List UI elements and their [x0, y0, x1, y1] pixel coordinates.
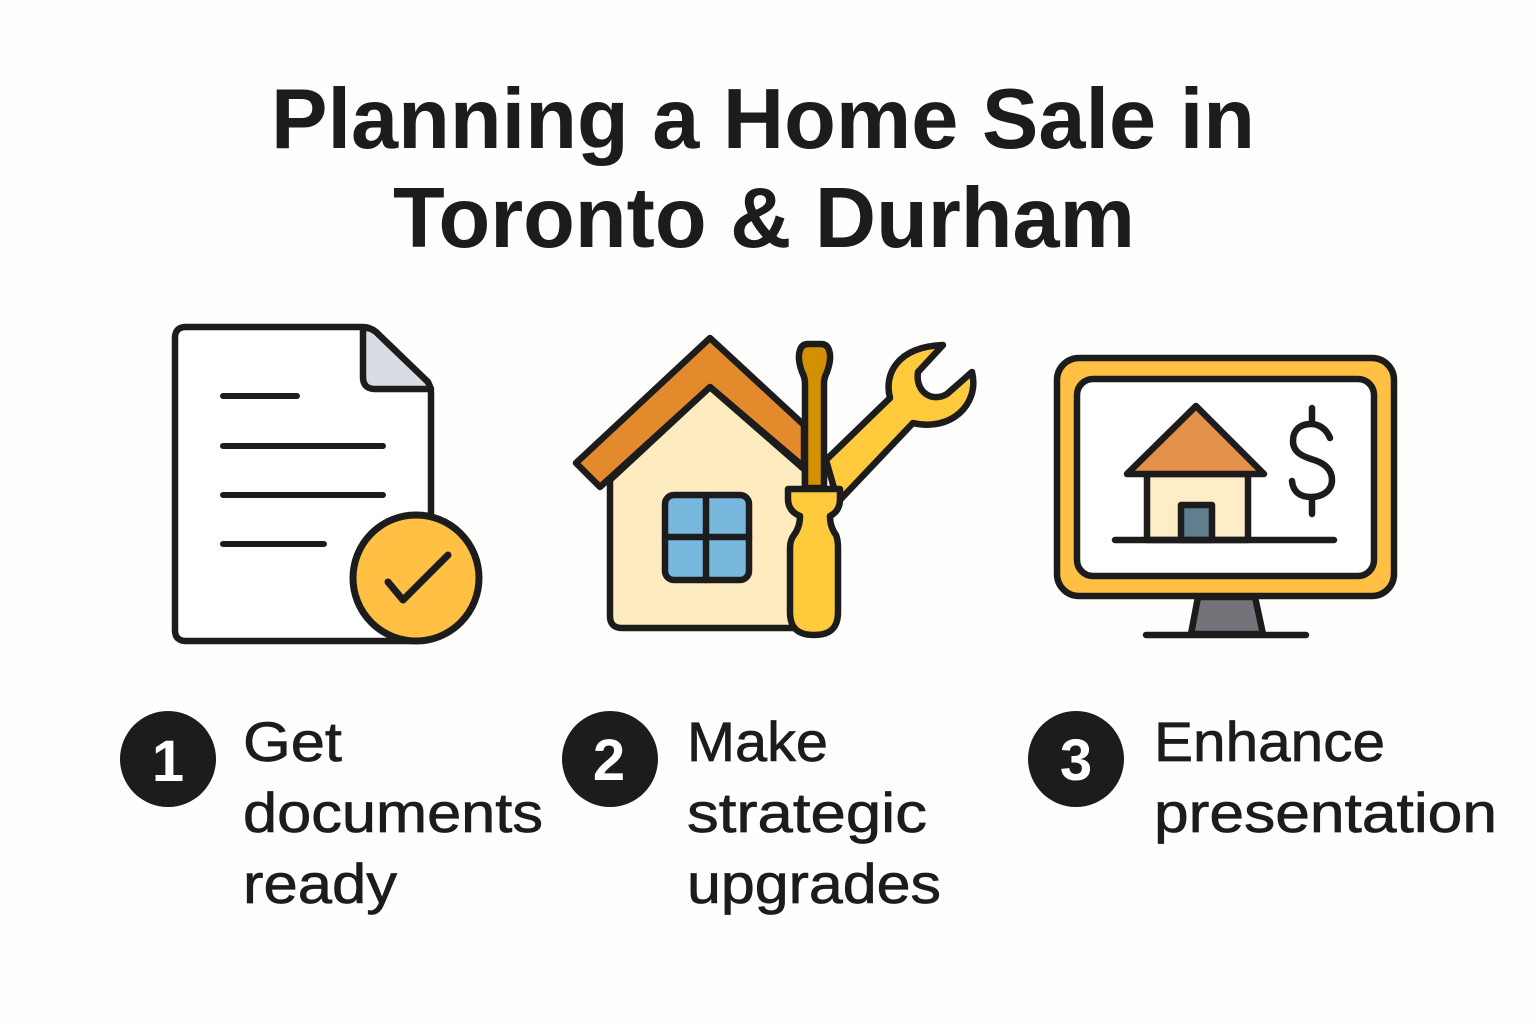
step 3: 3 [1060, 728, 1092, 793]
icon: document with check badge [175, 327, 479, 641]
title: Planning a Home Sale in [271, 72, 1255, 167]
wrench [826, 345, 973, 502]
screwdriver [788, 344, 840, 635]
monitor frame [1057, 358, 1394, 596]
title: Toronto & Durham [393, 171, 1135, 266]
step 3 [1028, 710, 1497, 844]
step 1: Get [243, 710, 342, 773]
step 1: documents [243, 781, 543, 844]
icon: monitor with house listing [1057, 358, 1394, 635]
monitor stand [1191, 597, 1263, 634]
dollar sign [1292, 408, 1332, 514]
house body [610, 387, 805, 628]
roof [576, 338, 804, 487]
step 2: upgrades [687, 852, 941, 915]
step 1: 1 [152, 729, 184, 794]
step 1 [120, 710, 543, 915]
step 3: presentation [1154, 781, 1497, 844]
step 2: Make [687, 710, 828, 773]
listing house [1115, 406, 1334, 540]
step 1: ready [243, 852, 397, 915]
step 3: Enhance [1154, 710, 1385, 773]
title [271, 72, 1255, 266]
step 2: 2 [593, 728, 625, 793]
window [665, 495, 749, 580]
icon: house with tools [576, 338, 973, 635]
step 2 [562, 710, 941, 915]
step 2: strategic [687, 781, 927, 844]
